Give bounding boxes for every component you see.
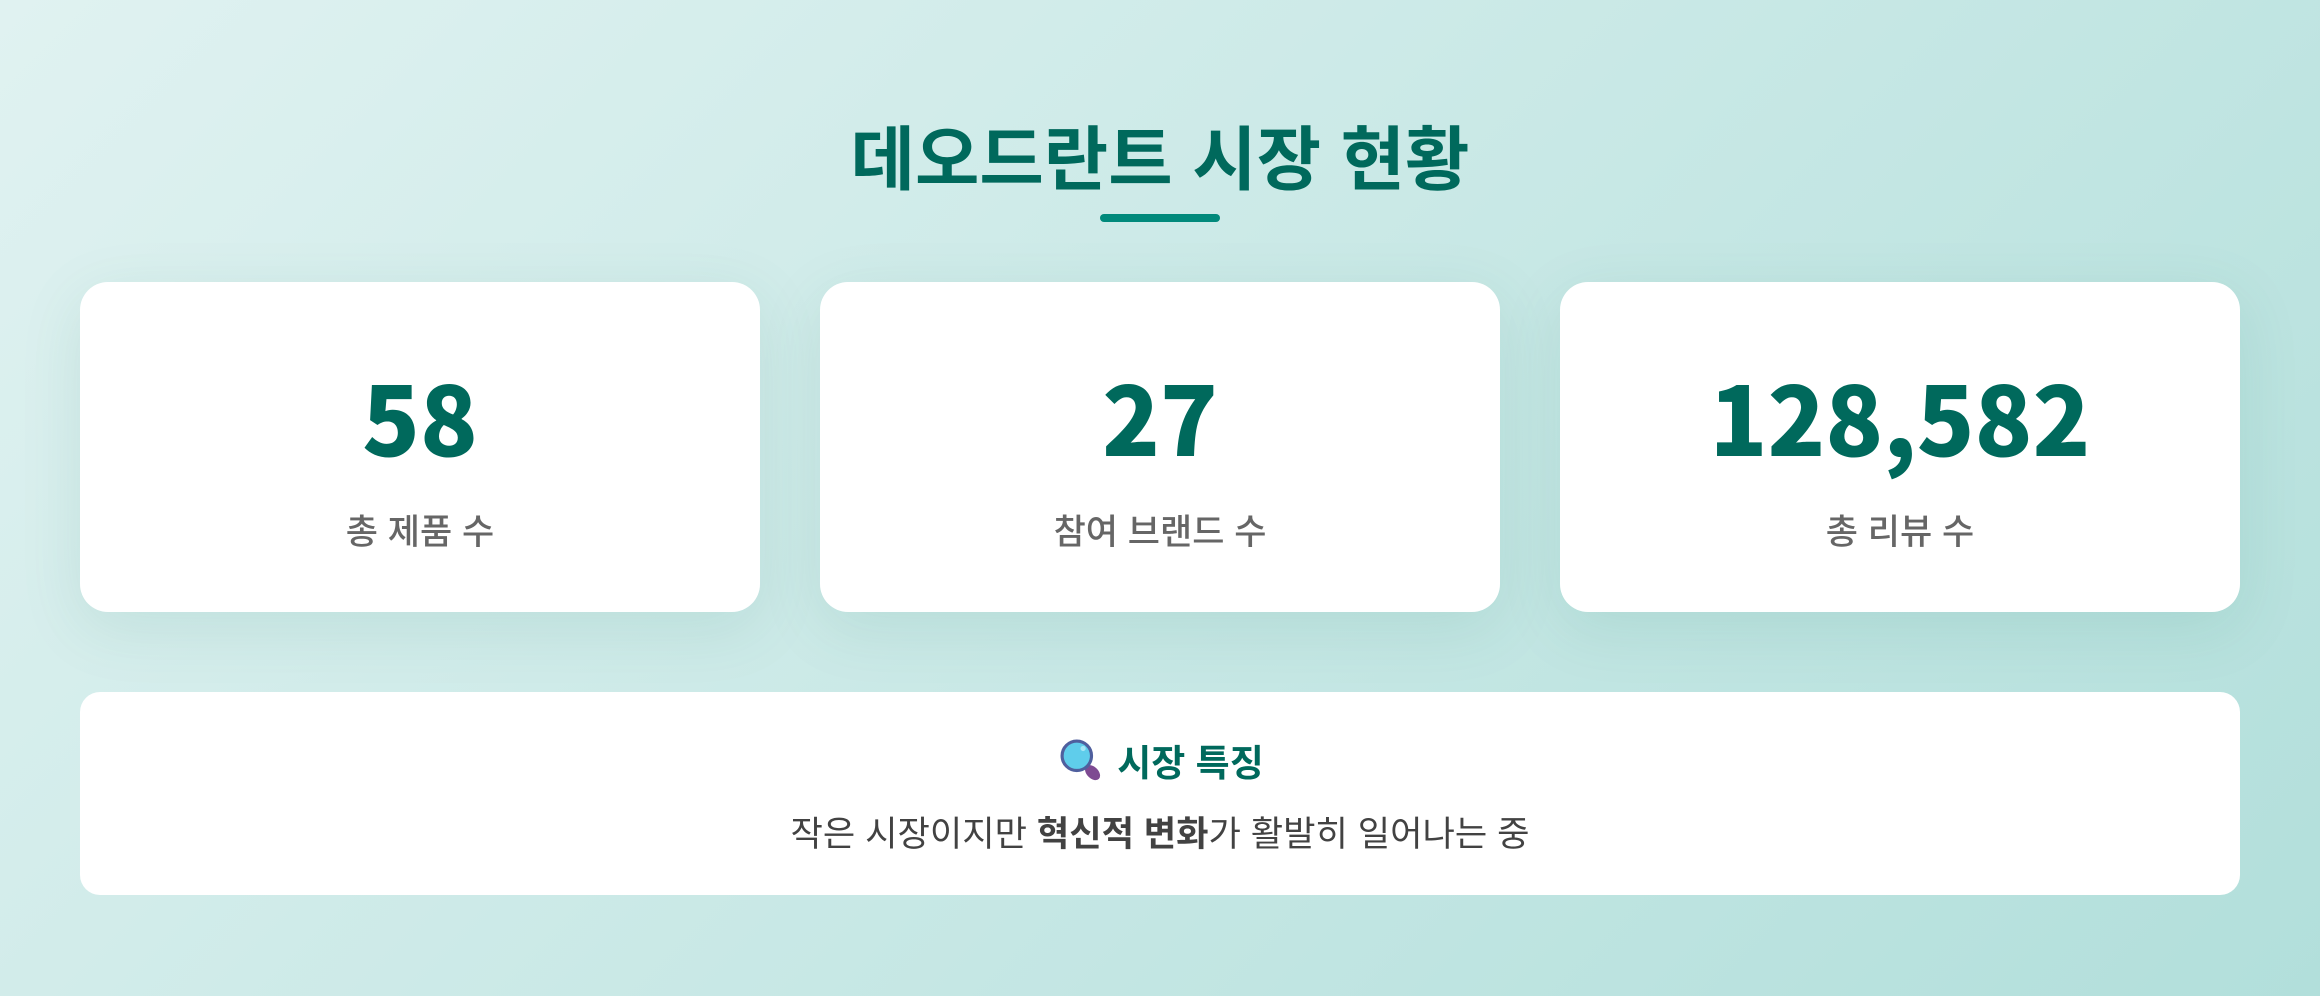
title: 데오드란트 시장 현황 bbox=[851, 104, 1469, 205]
label: total products: 총 제품 수 bbox=[346, 504, 494, 555]
stat card: total reviews bbox=[1560, 282, 2240, 612]
number: 27: 27 bbox=[1102, 347, 1218, 484]
description text: 작은 시장이지만 혁신적 변화가 활발히 일어나는 중 bbox=[791, 806, 1529, 857]
title underline bbox=[1100, 214, 1220, 222]
label: total reviews: 총 리뷰 수 bbox=[1826, 504, 1974, 555]
panel heading: 시장 특징 bbox=[1117, 733, 1264, 787]
stat card: total products bbox=[80, 282, 760, 612]
number: 128,582: 128,582 bbox=[1710, 347, 2090, 484]
stat card: participating brands bbox=[820, 282, 1500, 612]
icon: magnifying glass bbox=[1060, 740, 1100, 780]
label: participating brands: 참여 브랜드 수 bbox=[1054, 504, 1266, 555]
panel: market characteristics bbox=[80, 692, 2240, 895]
number: 58: 58 bbox=[362, 347, 478, 484]
